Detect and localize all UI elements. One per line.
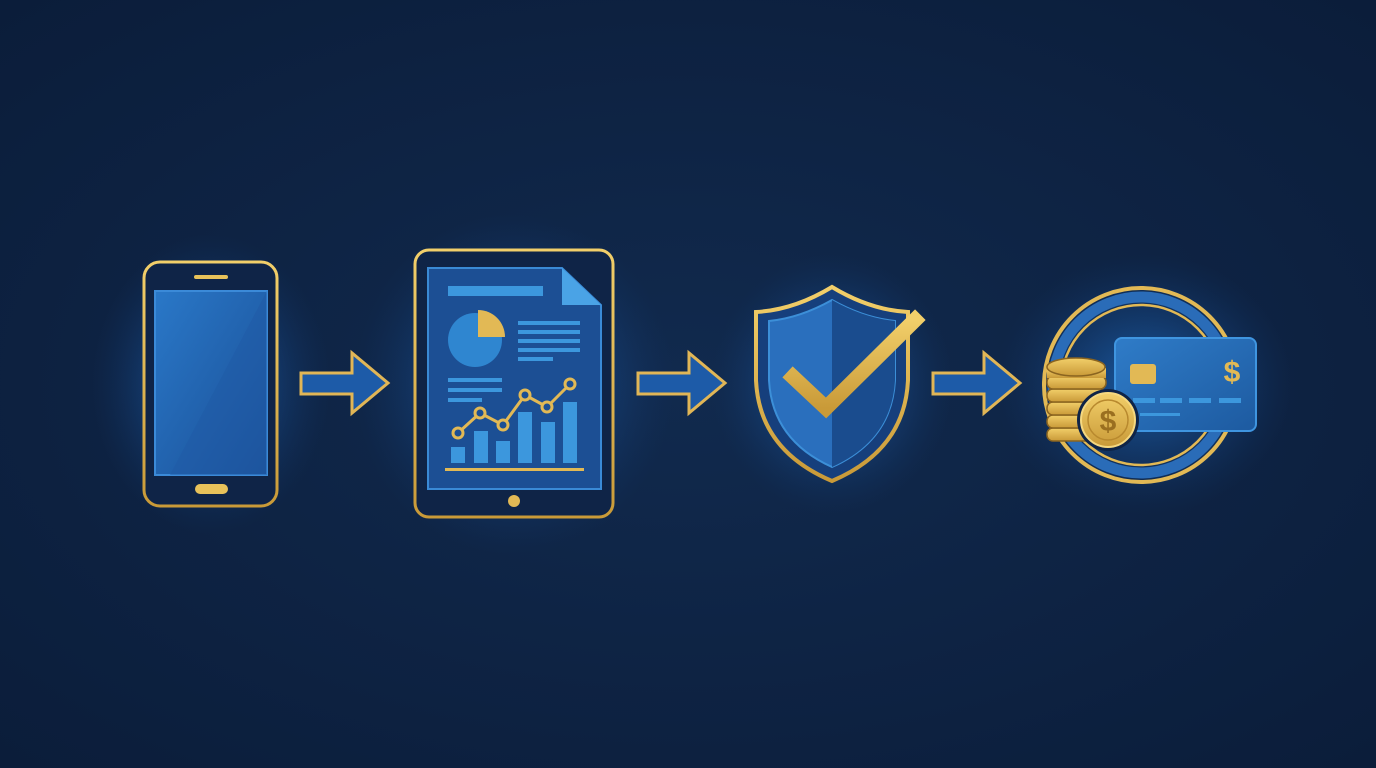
pie chart (448, 310, 505, 367)
card (1115, 338, 1256, 431)
arrow 3 (933, 353, 1020, 413)
arrow 2 (638, 353, 725, 413)
big coin (1077, 389, 1139, 451)
card: $ (1224, 356, 1241, 389)
icon: payment coins and card (1044, 288, 1256, 482)
bar chart (451, 402, 577, 463)
text lines (448, 321, 580, 402)
icon: tablet report (415, 250, 613, 517)
icon: shield with check (756, 287, 915, 481)
arrow 1 (301, 353, 388, 413)
coin stack (1047, 358, 1106, 441)
big coin: $ (1100, 405, 1117, 438)
glows (90, 214, 1295, 554)
title bar (448, 286, 543, 296)
icon: smartphone (144, 262, 277, 506)
line chart (453, 379, 575, 438)
